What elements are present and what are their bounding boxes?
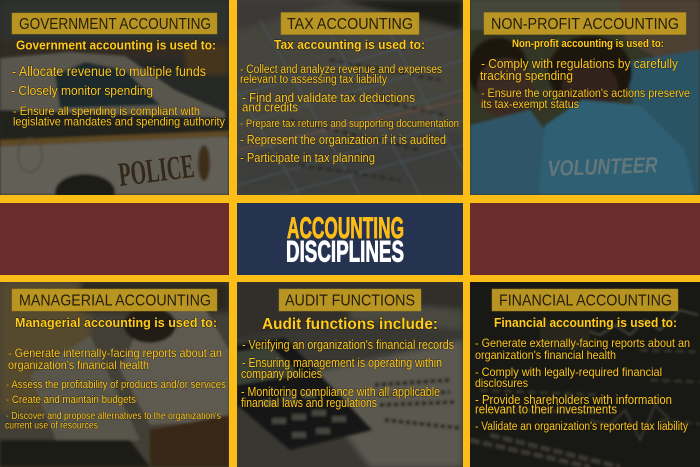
list: managerial uses: - Discover and propose alternatives to the organization's [6,411,221,422]
photo: stressed manager [0,282,229,467]
panel: financial accounting [470,282,700,467]
list: financial uses: organization's financial health [475,348,616,362]
list: government uses: - Closely monitor spending [11,83,153,98]
list: managerial uses [5,346,226,432]
panel: left maroon band [0,203,229,275]
subheading: Managerial accounting is used to: [15,315,217,330]
list: tax uses: and credits [242,100,298,114]
list: audit functions: financial laws and regulations [241,396,377,410]
list: tax uses: - Find and validate tax deductions [242,90,415,105]
subheading: Audit functions include: [262,316,438,333]
list: audit functions: - Ensuring management is operating within [242,356,442,370]
heading: managerial accounting: MANAGERIAL ACCOUNTING [19,292,211,310]
list: audit functions [241,338,454,410]
list: financial uses [475,336,690,433]
heading: audit functions: AUDIT FUNCTIONS [285,292,415,310]
list: tax uses: - Collect and analyze revenue and expenses [240,64,442,76]
list: managerial uses: - Generate internally-facing reports about an [8,346,222,360]
list: government uses [11,64,225,128]
photo lettering: POLICE: POLICE [116,148,196,194]
title: accounting: ACCOUNTING [287,212,404,245]
subheading: Government accounting is used to: [16,38,216,52]
photo: police car [0,0,229,210]
list: non-profit uses: its tax-exempt status [481,97,579,111]
list: audit functions: - Monitoring compliance with all applicable [241,385,440,399]
heading: government accounting: GOVERNMENT ACCOUNTING [19,16,211,33]
panel: right maroon band [470,203,700,275]
title: disciplines: DISCIPLINES [286,236,404,268]
list: managerial uses: organization's financial health [8,358,149,372]
subheading: Non-profit accounting is used to: [512,38,664,50]
list: tax uses [240,64,459,165]
list: audit functions: - Verifying an organization's financial records [242,338,454,352]
photo: stock chart screen [470,282,700,467]
list: financial uses: disclosures [475,376,528,390]
heading: financial accounting: FINANCIAL ACCOUNTING [499,292,672,310]
subheading: Financial accounting is used to: [494,315,677,330]
photo: calculator on paperwork [237,282,463,467]
list: financial uses: - Comply with legally-required financial [475,365,662,379]
list: financial uses: relevant to their investments [475,402,617,416]
list: government uses: - Ensure all spending is compliant with [13,104,200,118]
list: non-profit uses: - Comply with regulations by carefully [481,56,678,71]
list: managerial uses: - Assess the profitability of products and/or services [6,379,226,391]
list: tax uses: - Prepare tax returns and supporting documentation [240,118,459,130]
list: government uses: legislative mandates and spending authority [13,114,225,128]
list: non-profit uses: tracking spending [480,68,573,83]
list: managerial uses: - Create and maintain budgets [6,394,136,406]
panel: audit functions [237,282,463,467]
list: financial uses: - Provide shareholders with information [475,393,672,407]
photo: ledger paper [237,0,463,195]
list: tax uses: - Represent the organization if it is audited [240,133,446,147]
heading: non-profit accounting: NON-PROFIT ACCOUNTING [491,16,679,33]
panel: non-profit accounting [468,0,700,195]
subheading: Tax accounting is used to: [274,37,425,52]
list: non-profit uses [480,56,690,111]
list: tax uses: relevant to assessing tax liability [240,74,387,86]
shirt lettering: VOLUNTEER [547,152,658,181]
panel: government accounting [0,0,229,210]
photo: volunteers [468,0,700,195]
list: tax uses: - Participate in tax planning [240,151,375,165]
heading: tax accounting: TAX ACCOUNTING [287,16,413,33]
list: government uses: - Allocate revenue to multiple funds [12,64,206,79]
panel: title block [237,203,463,275]
list: managerial uses: current use of resources [5,420,98,432]
panel: managerial accounting [0,282,229,467]
panel: tax accounting [237,0,463,195]
list: audit functions: company policies [241,367,322,381]
